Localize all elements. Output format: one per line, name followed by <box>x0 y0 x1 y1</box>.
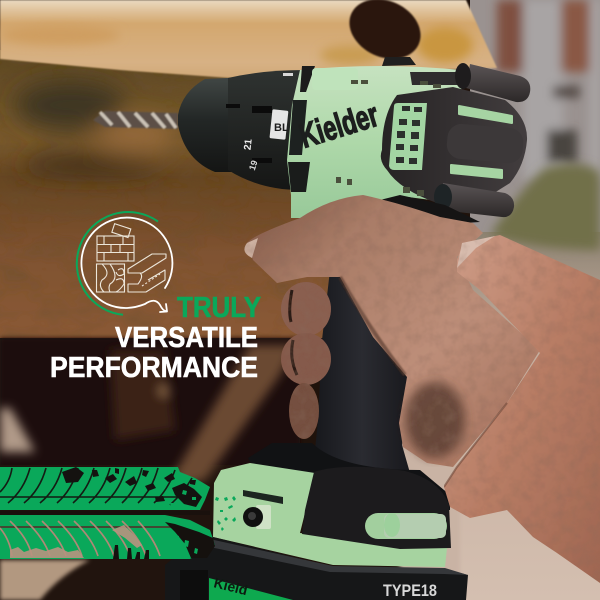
BL logo badge <box>269 109 289 140</box>
VERSATILE: VERSATILE <box>115 322 258 354</box>
tyre track: scattered green fragments <box>215 496 236 531</box>
beam sunlit top face base <box>0 0 497 78</box>
right background: ground base <box>440 232 600 600</box>
torque numbers <box>243 138 260 172</box>
collar <box>248 443 450 510</box>
tyre track: upper band <box>0 467 210 510</box>
cap rib panel <box>446 123 524 164</box>
white ring and arrow <box>81 218 172 312</box>
icon: materials circle <box>77 212 172 315</box>
Kielder logo: Kielder <box>295 96 383 156</box>
vent grille <box>389 103 427 170</box>
battery label: Kield <box>212 574 249 598</box>
PERFORMANCE: PERFORMANCE <box>50 352 258 384</box>
battery <box>165 537 468 600</box>
dark base panel <box>302 467 451 549</box>
icon: steel beam <box>128 254 166 292</box>
lever <box>365 513 447 539</box>
drill base <box>165 443 468 600</box>
headline <box>50 292 261 384</box>
supporting hand <box>444 235 600 583</box>
green housing <box>287 66 470 218</box>
drill handle <box>312 270 412 480</box>
green arc <box>77 212 158 315</box>
dark underside <box>0 338 300 470</box>
right background: base wall <box>470 0 600 250</box>
bottom cylinder <box>434 183 514 217</box>
chuck <box>178 77 250 172</box>
cap green slots <box>451 106 512 178</box>
right background: bush <box>490 164 600 250</box>
right background: ground near handle <box>400 440 460 600</box>
small vents <box>336 80 441 196</box>
gripping hand: fingers <box>281 282 331 439</box>
beam lower face <box>0 50 330 338</box>
torque numbers: 19 <box>247 159 260 172</box>
BL logo badge: BL <box>274 122 289 134</box>
slot <box>243 490 283 504</box>
torque numbers: 21 <box>243 138 255 151</box>
drill <box>178 57 530 225</box>
screw <box>243 505 271 529</box>
drill bit <box>93 111 178 129</box>
gear collar <box>228 70 305 190</box>
TYPE 18: TYPE18 <box>383 581 437 600</box>
green base <box>213 463 447 567</box>
tyre track: lower band <box>0 515 215 559</box>
gripping hand: palm <box>244 195 540 467</box>
TRULY: TRULY <box>177 292 261 324</box>
right background: building <box>497 0 600 180</box>
top cylinder <box>455 63 530 102</box>
central tread gap <box>0 510 210 515</box>
icon: wood grain <box>96 264 124 292</box>
rear black cap <box>381 87 527 208</box>
hole in beam <box>340 0 430 70</box>
bottom-left ground patch <box>0 560 90 600</box>
icon: bricks <box>97 224 134 261</box>
